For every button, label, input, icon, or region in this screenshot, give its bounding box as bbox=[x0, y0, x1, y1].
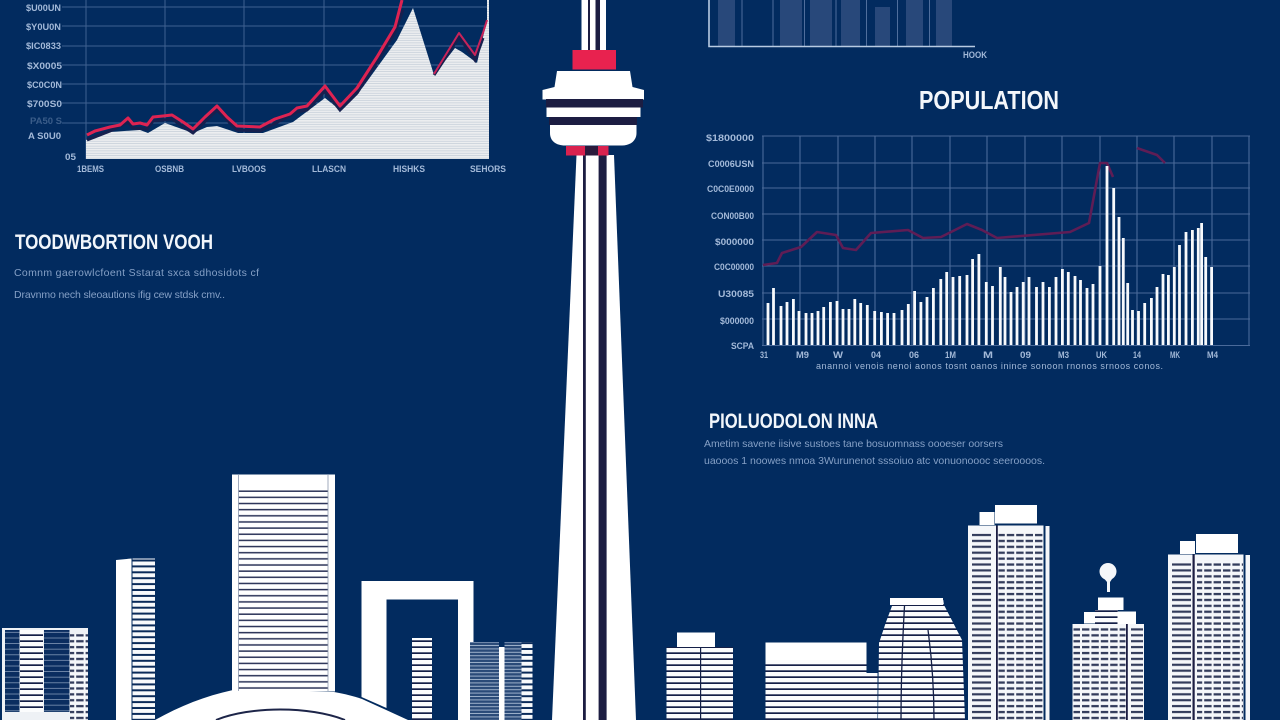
x axis labels: M3 bbox=[1058, 350, 1069, 361]
y axis labels: $IC0833 bbox=[26, 41, 61, 52]
y axis labels: $000000 bbox=[715, 237, 754, 248]
y axis labels: $000000 bbox=[720, 316, 754, 327]
CN tower bbox=[542, 0, 644, 720]
text block: left description bbox=[14, 267, 259, 301]
building: arch frame bbox=[362, 581, 474, 720]
x axis labels: M4 bbox=[1207, 350, 1219, 361]
x axis labels: 09 bbox=[1020, 350, 1031, 361]
observation pod bbox=[542, 71, 644, 146]
y axis labels: CON00B00 bbox=[711, 211, 754, 222]
heading: population: POPULATION bbox=[919, 85, 1059, 115]
red line series bbox=[87, 0, 402, 135]
dark red trend line bbox=[763, 148, 1165, 265]
red line right segment bbox=[434, 20, 487, 74]
y axis labels: C0C00000 bbox=[714, 262, 754, 273]
y axis labels: U30085 bbox=[718, 289, 755, 300]
x axis labels bbox=[760, 350, 1219, 361]
red collar bbox=[572, 50, 616, 70]
building: tall tower bbox=[968, 505, 1050, 720]
text block: population description: Ametim savene iisive sustoes tane bosuomnass oooeser oorsers bbox=[704, 438, 1003, 450]
heading: population text block: PIOLUODOLON INNA bbox=[709, 410, 878, 433]
panel: population chart bbox=[706, 133, 1250, 371]
y axis labels: $Y0U0N bbox=[26, 22, 61, 33]
y axis labels: $X0005 bbox=[27, 61, 63, 72]
tower shaft bbox=[552, 155, 636, 720]
x axis labels: HISHKS bbox=[393, 164, 425, 175]
x axis labels: SEHORS bbox=[470, 164, 506, 175]
y axis labels: A S0U0 bbox=[28, 131, 61, 142]
building: left window tower bbox=[2, 628, 88, 720]
heading: left text block: TOODWBORTION VOOH bbox=[15, 231, 213, 254]
lower red collar bbox=[566, 146, 608, 156]
chart caption: anannoi venois nenoi aonos tosnt oanos inince sonoon rnonos srnoos conos. bbox=[816, 361, 1163, 371]
x axis labels bbox=[77, 164, 506, 175]
x axis labels: 14 bbox=[1133, 350, 1142, 361]
building: city hall dome bbox=[155, 690, 408, 720]
x axis labels: 31 bbox=[760, 350, 769, 361]
axes bbox=[709, 0, 975, 46]
x axis labels: 06 bbox=[909, 350, 919, 361]
building: tapered crown tower bbox=[878, 598, 965, 720]
x axis labels: MK bbox=[1170, 350, 1180, 361]
y axis labels: $1800000 bbox=[706, 133, 754, 144]
antenna bbox=[582, 0, 606, 50]
building: far right tower bbox=[1168, 534, 1250, 720]
x axis labels: 1BEMS bbox=[77, 164, 104, 175]
y axis labels: C0C0E0000 bbox=[707, 184, 754, 195]
building: striped central tower bbox=[232, 474, 335, 692]
y axis labels: $C0C0N bbox=[27, 80, 62, 91]
y axis labels: PA50 S bbox=[30, 116, 62, 127]
x axis labels: W bbox=[833, 350, 843, 361]
y axis labels: 05 bbox=[65, 152, 77, 163]
x axis labels: LLASCN bbox=[312, 164, 346, 175]
x axis labels: UK bbox=[1096, 350, 1107, 361]
building: slab tower bbox=[116, 558, 155, 720]
building: right low tower bbox=[666, 632, 733, 720]
x axis labels: 1M bbox=[945, 350, 956, 361]
axis label: HOOK bbox=[963, 50, 987, 61]
x axis labels: 04 bbox=[871, 350, 882, 361]
chart grid bbox=[762, 136, 1250, 346]
x axis labels: OSBNB bbox=[155, 164, 184, 175]
shadow under line bbox=[87, 10, 483, 140]
building: dark glass tower bbox=[470, 642, 532, 720]
y axis labels bbox=[26, 3, 77, 163]
white population bars bbox=[768, 166, 1212, 345]
building: wide low block bbox=[766, 642, 878, 720]
panel: top right bar chart bbox=[709, 0, 987, 61]
text block: left description: Comnm gaerowlcfoent Sstarat sxca sdhosidots cf bbox=[14, 267, 259, 279]
y axis labels: SCPA bbox=[731, 341, 754, 352]
x axis labels: M bbox=[983, 350, 993, 361]
x axis labels: LVBOOS bbox=[232, 164, 266, 175]
y axis labels: $700S0 bbox=[27, 99, 62, 110]
building: narrow striped tower bbox=[412, 638, 432, 720]
x axis labels: M9 bbox=[796, 350, 809, 361]
text block: population description bbox=[704, 438, 1045, 467]
text block: left description: Dravnmo nech sleoautions ifig cew stdsk cmv.. bbox=[14, 289, 225, 301]
text block: population description: uaooos 1 noowes nmoa 3Wurunenot sssoiuo atc vonuonoooc seeroooos. bbox=[704, 455, 1045, 467]
area series bbox=[86, 0, 489, 159]
y axis labels bbox=[706, 133, 755, 352]
y axis labels: C0006USN bbox=[708, 159, 754, 170]
building: spire tower with bulb bbox=[1072, 563, 1144, 720]
y axis labels: $U00UN bbox=[26, 3, 61, 14]
panel: left line and area chart bbox=[26, 0, 506, 175]
faint bars bbox=[718, 0, 952, 46]
